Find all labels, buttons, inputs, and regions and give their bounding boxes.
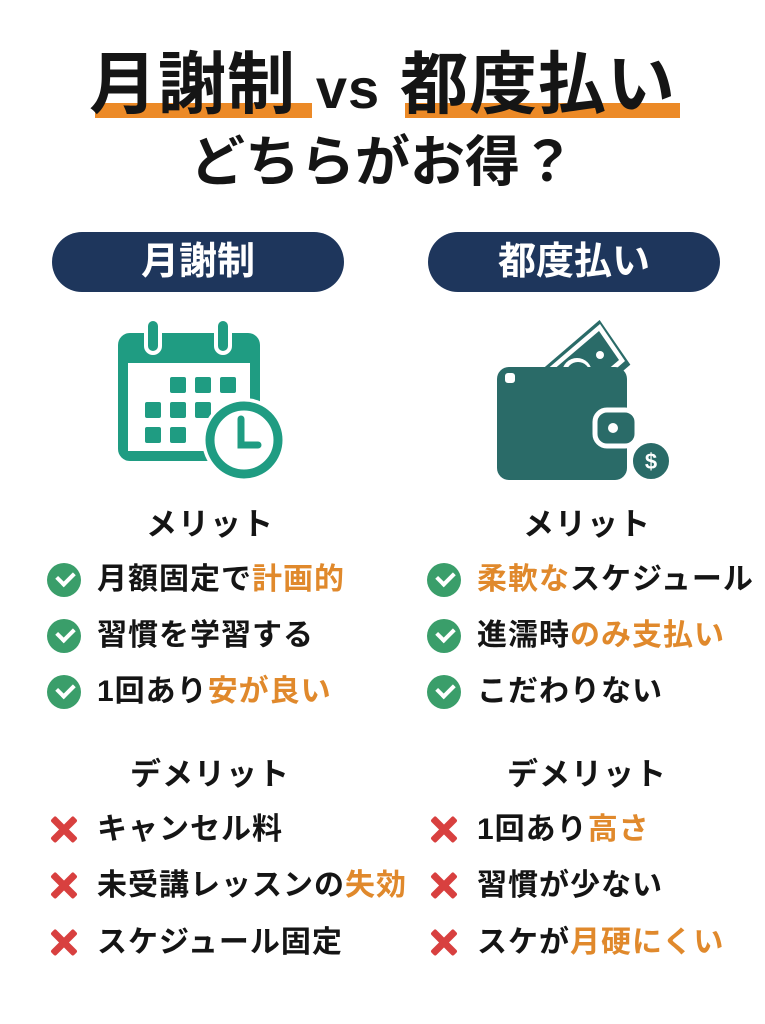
title underline left [95, 103, 312, 118]
icon: wallet with money: $ [645, 449, 657, 474]
pill: 月謝制: 月謝制 [141, 241, 255, 283]
demerits left [50, 813, 407, 959]
demerits right: スケが月硬にくい [477, 926, 724, 959]
merits left: 1回あり安が良い [97, 675, 332, 708]
icon: calendar with clock [118, 321, 282, 478]
demerits right: 習慣が少ない [477, 869, 663, 902]
demerits left: スケジュール固定 [97, 926, 343, 959]
heading: demerit right: デメリット [507, 757, 667, 792]
heading: merit left: メリット [146, 507, 274, 542]
merits right: 進濡時のみ支払い [477, 619, 725, 652]
title line 2: どちらがお得？ [190, 131, 575, 193]
merits right [427, 563, 754, 709]
merits left: 月額固定で計画的 [97, 563, 345, 596]
demerits right: 1回あり高さ [477, 813, 650, 846]
pill: 都度払い: 都度払い [498, 241, 650, 283]
demerits right [430, 813, 724, 959]
pill: 都度払い [428, 232, 720, 292]
demerits left: 未受講レッスンの失効 [97, 869, 407, 902]
heading: demerit left: デメリット [130, 757, 290, 792]
merits left: 習慣を学習する [97, 619, 314, 652]
merits left [47, 563, 345, 709]
merits right: 柔軟なスケジュール [477, 563, 754, 596]
title underline right [405, 103, 680, 118]
icon: wallet with money [497, 320, 669, 480]
pill: 月謝制 [52, 232, 344, 292]
demerits left: キャンセル料 [97, 813, 283, 846]
merits right: こだわりない [477, 675, 663, 708]
heading: merit right: メリット [523, 507, 651, 542]
title line 1: 月謝制 vs 都度払い [89, 47, 676, 123]
